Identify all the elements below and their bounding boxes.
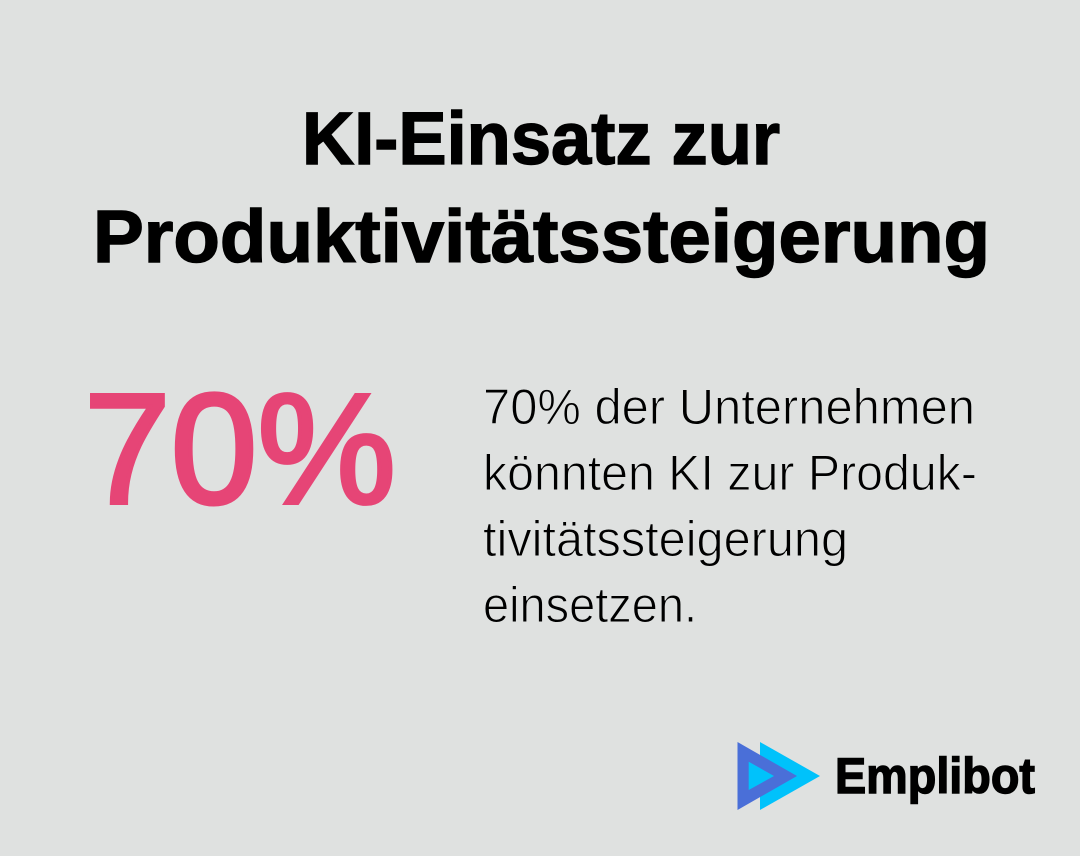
title: Produktivitätssteigerung (93, 195, 990, 278)
description text: tivitätssteigerung (483, 511, 848, 567)
description text: könnten KI zur Produk- (483, 445, 977, 501)
big statistic: 70%: 70% (84, 362, 396, 537)
logo wordmark: Emplibot (835, 748, 1035, 804)
logo: Emplibot (738, 742, 1035, 810)
description text: 70% der Unternehmen (483, 379, 975, 435)
title: KI-Einsatz zur (302, 97, 780, 180)
title (93, 97, 990, 278)
description text: einsetzen. (483, 577, 697, 633)
icon: play triangles (738, 742, 820, 810)
description text (483, 379, 977, 633)
